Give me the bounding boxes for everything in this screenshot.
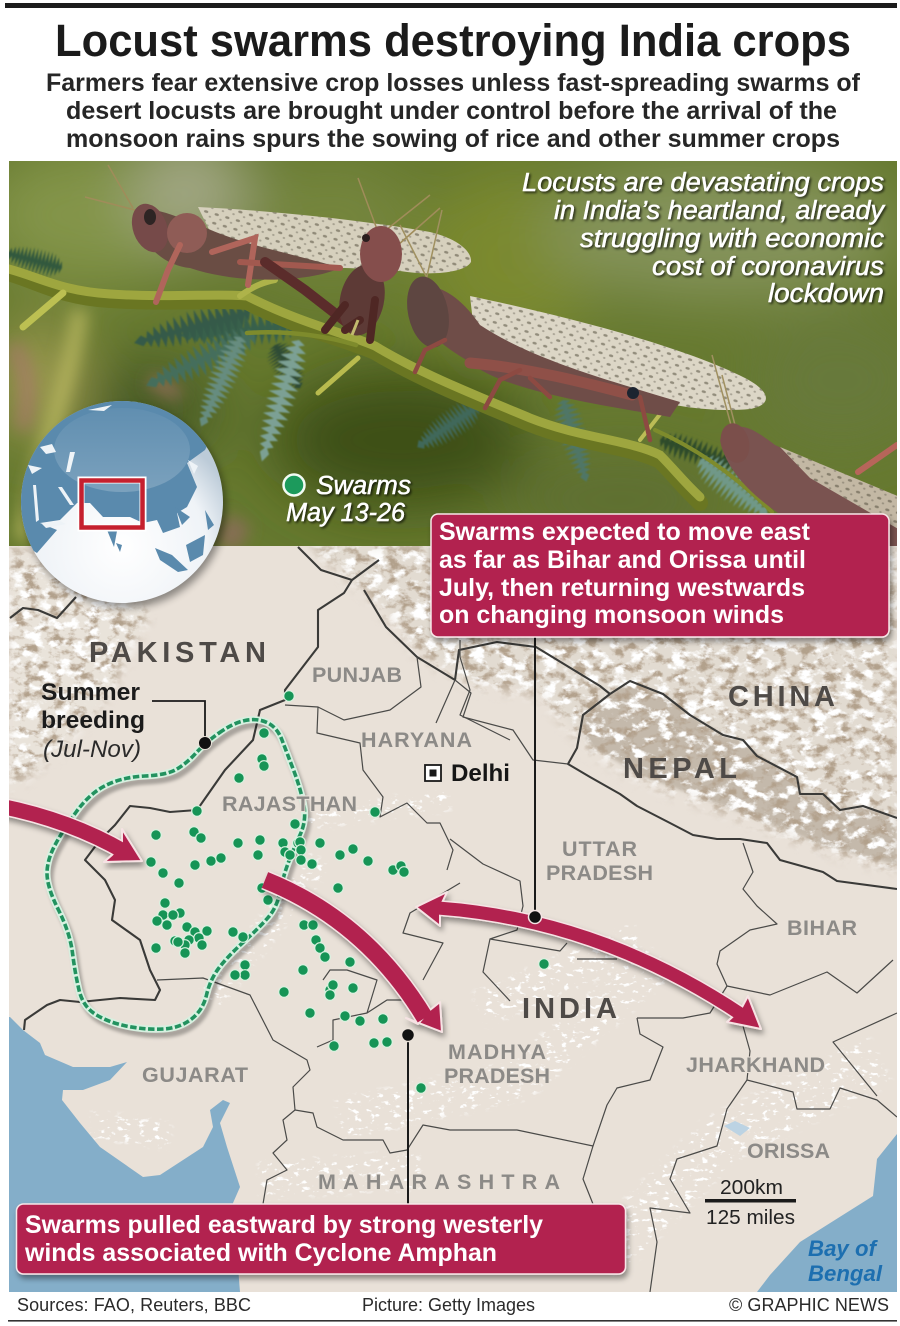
callout: eastward forecast: as far as Bihar and Orissa until [439, 546, 806, 574]
callout: eastward forecast: on changing monsoon winds [439, 601, 784, 629]
place labels: NEPAL [623, 753, 737, 785]
blurred stalks [12, 310, 240, 547]
subtitle: Farmers fear extensive crop losses unless fast-spreading swarms of [46, 69, 861, 97]
callout: eastward forecast [431, 514, 889, 637]
label: summer breeding: Summer [41, 679, 140, 706]
place labels: UTTAR [562, 837, 637, 861]
label: summer breeding: (Jul-Nov) [43, 736, 141, 763]
branch [5, 268, 772, 512]
leaves [0, 239, 778, 528]
place labels: PRADESH [546, 861, 653, 885]
label: Bay of Bengal [808, 1236, 883, 1286]
place labels: GUJARAT [142, 1063, 248, 1087]
national borders [10, 547, 897, 1030]
footer [8, 1295, 897, 1322]
callout: eastward forecast: July, then returning westwards [439, 574, 805, 602]
scale bar: 125 miles [706, 1207, 795, 1229]
label: summer breeding [41, 679, 212, 763]
arrow: wind into Rajasthan [0, 806, 142, 862]
Delhi marker [424, 764, 508, 782]
place labels: MADHYA [448, 1040, 546, 1064]
subtitle [46, 69, 861, 153]
relief: central India streaks [90, 800, 880, 1260]
legend: swarms: May 13-26 [286, 499, 406, 527]
caption on photo: Locusts are devastating crops [522, 169, 884, 197]
leader: to cyclone note [402, 1028, 414, 1206]
callout: Cyclone Amphan: Swarms pulled eastward by strong westerly [25, 1211, 543, 1239]
footer: Sources: FAO, Reuters, BBC [17, 1295, 251, 1315]
legend: swarms [284, 472, 411, 527]
place labels: PUNJAB [312, 663, 402, 687]
place labels: PAKISTAN [89, 637, 266, 669]
callout: Cyclone Amphan [16, 1204, 626, 1274]
callout: eastward forecast: Swarms expected to move east [439, 518, 811, 546]
locator globe [15, 400, 230, 608]
sea: Bay of Bengal [757, 1134, 897, 1292]
scale bar [705, 1179, 796, 1224]
place labels: INDIA [522, 993, 617, 1025]
caption on photo: cost of coronavirus [652, 253, 884, 281]
state borders [157, 640, 897, 1292]
locust 2 [325, 178, 440, 340]
legend: swarms: Swarms [316, 472, 411, 500]
place labels: MAHARASHTRA [318, 1170, 560, 1194]
arrow: two-way movement along the Ganges [416, 892, 761, 1029]
locust 4 [712, 355, 900, 548]
label: Bay of Bengal: Bengal [808, 1261, 883, 1286]
subtitle: monsoon rains spurs the sowing of rice and other summer crops [66, 125, 840, 153]
label: summer breeding: breeding [41, 707, 145, 734]
scale bar: 200km [720, 1177, 783, 1199]
title: Locust swarms destroying India crops [55, 15, 851, 66]
top rule [5, 3, 897, 8]
place labels: BIHAR [787, 916, 857, 940]
footer: Picture: Getty Images [362, 1295, 535, 1315]
panel: map [0, 546, 897, 1292]
panel: locust photograph [0, 130, 900, 550]
locust 3 [400, 210, 766, 440]
place labels: PRADESH [444, 1064, 550, 1088]
footer: © GRAPHIC NEWS [729, 1295, 889, 1315]
place labels: RAJASTHAN [222, 792, 357, 816]
label: Bay of Bengal: Bay of [808, 1236, 879, 1261]
subtitle: desert locusts are brought under control before the arrival of the [66, 97, 837, 125]
Delhi marker: Delhi [451, 760, 510, 787]
leader: to east forecast [528, 630, 542, 924]
inland lakes [724, 1121, 750, 1136]
swarm sightings [146, 691, 549, 1093]
relief: Himalaya and China [310, 546, 897, 870]
place labels: CHINA [728, 681, 835, 713]
place labels: HARYANA [361, 728, 472, 752]
caption on photo [522, 169, 886, 308]
arrow: eastward to Madhya Pradesh [265, 880, 442, 1032]
sea: Arabian Sea [0, 1017, 240, 1292]
place labels: ORISSA [747, 1139, 830, 1163]
swarm area: summer breeding [47, 720, 308, 1034]
relief: western hills [9, 546, 150, 790]
locust 1 [85, 165, 471, 325]
caption on photo: struggling with economic [580, 225, 884, 253]
caption on photo: in India’s heartland, already [554, 197, 886, 225]
caption on photo: lockdown [768, 280, 884, 308]
callout: Cyclone Amphan: winds associated with Cyclone Amphan [24, 1239, 497, 1267]
place labels: JHARKHAND [686, 1053, 825, 1077]
place labels [89, 637, 857, 1194]
